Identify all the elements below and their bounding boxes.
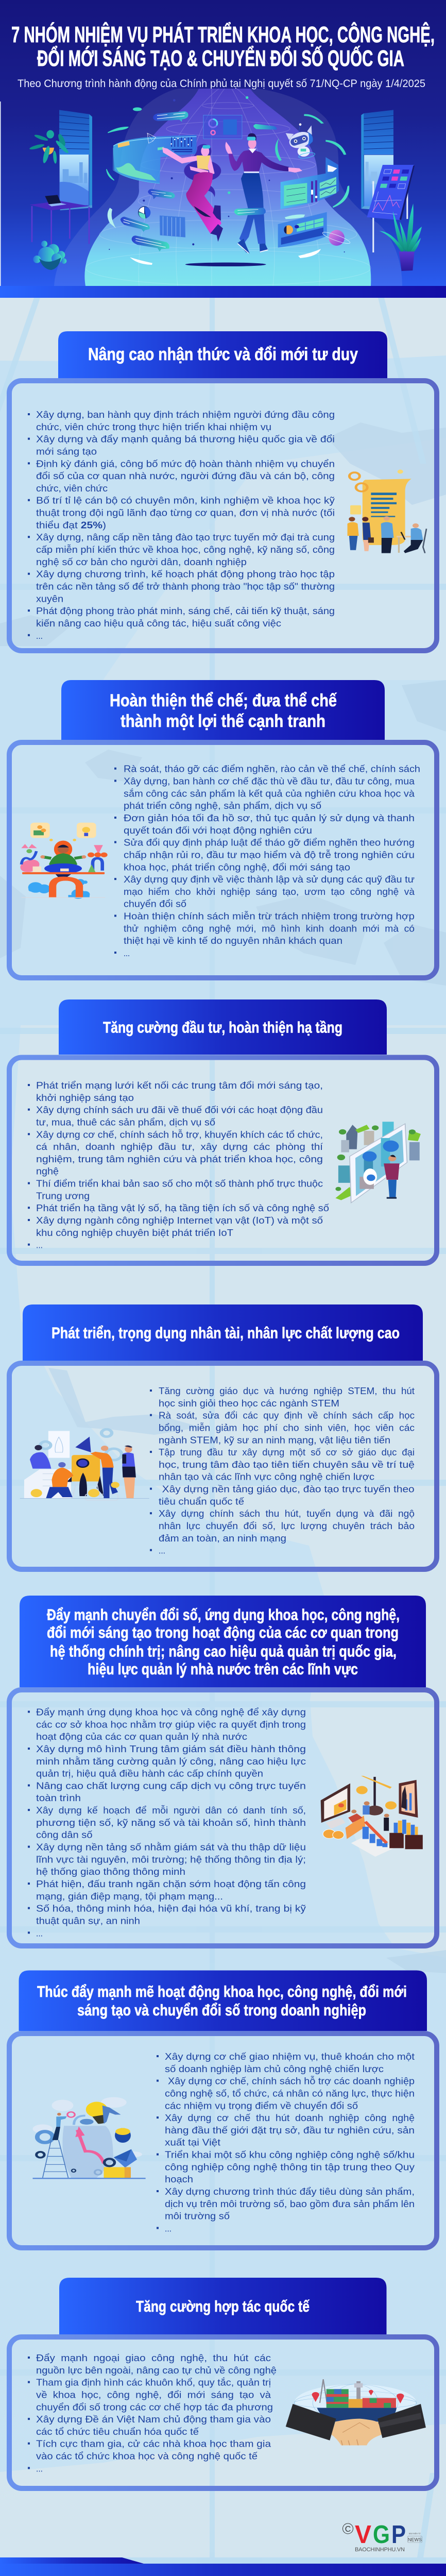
list 5 bbox=[28, 1706, 306, 1938]
list 5: Đẩy mạnh ứng dụng khoa học và công nghệ để xây dựng bbox=[36, 1706, 306, 1718]
list 6: Xây dựng cơ chế thu hút doanh nghiệp công nghệ bbox=[165, 2112, 415, 2123]
heading 4 bbox=[23, 1304, 423, 1361]
section 4: nhân tài bbox=[9, 1304, 437, 1569]
list 3: tư, mua, thuê các sản phẩm, dịch vụ số bbox=[36, 1117, 215, 1127]
site name: BAOCHINHPHU.VN bbox=[355, 2547, 405, 2553]
section 6: doanh nghiệp bbox=[9, 1970, 437, 2248]
list 4: bổng, miễn giảm học phí cho sinh viên, học viên các bbox=[159, 1422, 415, 1433]
list 2: Rà soát, tháo gỡ các điểm nghẽn, rào cản về thể chế, chính sách bbox=[124, 764, 420, 774]
shadow bbox=[185, 263, 263, 266]
list 2: thử nghiệm công nghệ mới, mô hình kinh doanh mới mà có bbox=[124, 923, 415, 934]
section 5: chuyển đổi số trong hệ thống chính trị bbox=[9, 1596, 437, 1946]
heading 7 bbox=[59, 2278, 386, 2334]
hero banner bbox=[0, 0, 446, 298]
list 2: khoa học, phát triển công nghệ, đổi mới sáng tạo bbox=[124, 861, 350, 872]
list 6: số doanh nghiệp làm chủ công nghệ chiến lược bbox=[165, 2063, 384, 2074]
list 6: công nghiệp công nghệ thông tin tập trung theo Quy bbox=[165, 2161, 415, 2172]
list 1: xuyên bbox=[36, 593, 63, 604]
list 3: Xây dựng cơ chế, chính sách hỗ trợ, khuyến khích các tổ chức, bbox=[36, 1129, 323, 1140]
list 7: chuyển đổi số trong các cơ chế hợp tác đa phương bbox=[36, 2401, 273, 2412]
list 4: Xây dựng chính sách thu hút, tuyển dụng và đãi ngộ bbox=[159, 1508, 415, 1519]
list 6: các nhiệm vụ trọng điểm về chuyển đổi số bbox=[165, 2100, 358, 2111]
heading 3 bbox=[59, 999, 387, 1055]
list 7: nguồn lực bên ngoài, nâng cao tự chủ về công nghệ bbox=[36, 2365, 277, 2376]
list 4: đảm an toàn, an ninh mạng bbox=[159, 1533, 286, 1544]
list 3: khởi nghiệp sáng tạo bbox=[36, 1092, 134, 1103]
VGP logo bbox=[343, 2521, 422, 2553]
list 1: thuật trong đội ngũ lãnh đạo từng cơ quan, đơn vị nhà nước (tối bbox=[36, 507, 335, 518]
list 7: Tích cực tham gia, cử các nhà khoa học tham gia bbox=[36, 2438, 271, 2449]
list 6: xuất tại Việt bbox=[165, 2137, 220, 2148]
left scene bbox=[29, 99, 266, 270]
list 5: mạng, gián điệp mạng, tội phạm mạng... bbox=[36, 1891, 223, 1902]
desk and laptop bbox=[29, 195, 90, 246]
list 5: các cơ sở khoa học nhằm trợ giúp việc ra quyết định trong bbox=[36, 1719, 306, 1730]
pie chart bbox=[138, 206, 150, 219]
heading 3: Tăng cường đầu tư, hoàn thiện hạ tầng bbox=[103, 1018, 342, 1037]
man with VR headset bbox=[226, 133, 302, 253]
list 6: hàng đầu thế giới đặt trụ sở, đầu tư nghiên cứu, sản bbox=[165, 2125, 415, 2136]
list 5: Xây dựng kế hoạch để mỗi người dân có danh tính số, bbox=[36, 1805, 306, 1816]
whiteboard bbox=[367, 165, 415, 252]
list 3: khu công nghiệp chuyên biệt phát triển IoT bbox=[36, 1227, 233, 1238]
list 5: minh nhằm tăng cường quản lý công, nâng cao hiệu lực bbox=[36, 1756, 306, 1767]
curved data panel bbox=[113, 133, 197, 184]
list 4: nhân lực chuyển đổi số, lực lượng chuyên trách bảo bbox=[159, 1520, 415, 1531]
panel 4 bbox=[9, 1363, 437, 1569]
illustration: smart city tablet bbox=[335, 1122, 421, 1203]
VGP letters: V bbox=[355, 2521, 371, 2549]
list 6: Xây dựng cơ chế, chính sách hỗ trợ các doanh nghiệp bbox=[168, 2076, 415, 2087]
list 1: cấp miễn phí kiến thức về khoa học, công nghệ, kỹ năng số, công bbox=[36, 544, 335, 555]
list 6: công nghệ số, tổ chức, cá nhân có năng lực, thực hiện bbox=[165, 2088, 415, 2099]
list 4: Tăng cường giáo dục và hướng nghiệp STEM, thu hút bbox=[159, 1385, 415, 1396]
list 6: ... bbox=[165, 2223, 171, 2234]
subtitle: Theo Chương trình hành động của Chính phủ tại Nghị quyết số 71/NQ-CP ngày 1/4/2025 bbox=[18, 78, 425, 90]
list 3: nghiệm, trung tâm nghiên cứu và phát triển khoa học, công bbox=[36, 1154, 323, 1164]
list 7: về khoa học, công nghệ, đổi mới sáng tạo và bbox=[36, 2389, 271, 2400]
list 4: Tập trung đầu tư xây dựng một số cơ sở giáo dục đại bbox=[159, 1447, 415, 1458]
list 5: toàn trình bbox=[36, 1792, 81, 1803]
list 2: Sửa đổi quy định pháp luật để tháo gỡ điểm nghẽn theo hướng bbox=[124, 837, 415, 848]
list 3: Thí điểm triển khai bản sao số cho một số thành phố trực thuộc bbox=[36, 1178, 323, 1189]
list 1: Xây dựng, ban hành quy định trách nhiệm người đứng đầu công bbox=[36, 409, 335, 420]
woman with VR headset bbox=[162, 144, 223, 242]
list 1: Xây dựng và đẩy mạnh quảng bá thương hiệu quốc gia về đổi bbox=[36, 434, 335, 445]
illustration: governance scale and digital devices bbox=[321, 1776, 423, 1857]
section 3: tăng cường đầu tư bbox=[9, 999, 437, 1263]
list 7: Tham gia định hình các khuôn khổ, quy tắc, quản trị bbox=[36, 2377, 271, 2388]
VGP letters bbox=[355, 2521, 406, 2549]
panel 3 bbox=[9, 1057, 437, 1263]
section 2: hoàn thiện thể chế bbox=[9, 680, 437, 978]
list 1: thiểu đạt 25% ) bbox=[36, 519, 106, 530]
heading 7: Tăng cường hợp tác quốc tế bbox=[136, 2297, 310, 2315]
bush bbox=[33, 241, 66, 270]
panel 5 bbox=[9, 1690, 437, 1946]
list 6: Triển khai một số khu công nghiệp công nghệ số/khu bbox=[165, 2149, 415, 2160]
hero background bbox=[0, 0, 446, 286]
VGP letters: G bbox=[373, 2521, 390, 2549]
list 5: Phát hiện, đấu tranh ngăn chặn sớm hoạt động tấn công bbox=[36, 1878, 306, 1889]
list 2: Đơn giản hóa tối đa hồ sơ, thủ tục quản lý sử dụng và thanh bbox=[124, 812, 415, 823]
top centre card bbox=[203, 115, 242, 139]
illustration: team building rocket bbox=[20, 1429, 149, 1500]
heading 6: sáng tạo và chuyển đổi số trong doanh nghiệp bbox=[77, 2001, 366, 2019]
list 5: Xây dựng nền tảng số nhằm giám sát và thu thập dữ liệu bbox=[36, 1841, 306, 1853]
list 6: môi trường số bbox=[165, 2211, 230, 2222]
list 7: ... bbox=[36, 2463, 43, 2473]
list 1: kiến nâng cao hiệu quả công tác, hiệu suất công việc bbox=[36, 618, 281, 629]
list 4: học, trung tâm đào tạo tiên tiến chuyên sâu về trí tuệ bbox=[159, 1459, 415, 1470]
list 4: ngành STEM, kỹ sư an ninh mạng, vật liệu tiên tiến bbox=[159, 1434, 390, 1445]
floating accents bbox=[228, 96, 349, 258]
news badge: NEWS bbox=[408, 2537, 422, 2542]
list 1: ... bbox=[36, 630, 43, 641]
list 2: chuyển đổi số bbox=[124, 899, 186, 909]
heading 5: hiệu lực quản lý nhà nước trên các lĩnh vực bbox=[88, 1660, 358, 1678]
list 5: thuật quân sự, an ninh bbox=[36, 1915, 140, 1926]
list 2: ... bbox=[124, 947, 130, 958]
list 5: quản trị, hiệu quả điều hành các cấp chính quyền bbox=[36, 1768, 263, 1779]
list 2: Xây dựng, ban hành cơ chế đặc thù về đầu tư, đầu tư công, mua bbox=[124, 775, 415, 786]
robot bbox=[286, 123, 315, 159]
list 2: chấp nhận rủi ro, đầu tư mạo hiểm và độ trễ trong nghiên cứu bbox=[124, 849, 415, 860]
list 3: Xây dựng ngành công nghiệp Internet vạn vật (IoT) và một số bbox=[36, 1215, 323, 1226]
hanging plant bbox=[29, 130, 70, 164]
copyright mark: C bbox=[345, 2525, 351, 2534]
news badge bbox=[408, 2532, 422, 2543]
list 2: quyết toán đối với hoạt động nghiên cứu bbox=[124, 825, 312, 836]
title bbox=[11, 21, 435, 71]
list 3: Phát triển mạng lưới kết nối các trung tâm đổi mới sáng tạo, bbox=[36, 1080, 323, 1091]
news badge: BÁO ĐIỆN TỬ bbox=[409, 2532, 421, 2535]
list 7: Xây dựng Đề án Việt Nam chủ động tham gia vào bbox=[36, 2414, 271, 2425]
list 4: Rà soát, sửa đổi các quy định về chính sách cấp học bbox=[159, 1410, 415, 1421]
list 6: dịch vụ trên môi trường số, bao gồm đưa sản phẩm lên bbox=[165, 2198, 415, 2209]
hero bottom bar bbox=[0, 286, 446, 298]
chart card bbox=[160, 215, 185, 238]
list 5: Nâng cao chất lượng cung cấp dịch vụ công trực tuyến bbox=[36, 1780, 306, 1791]
list 1: trên các nền tảng số để trở thành phong trào "học tập số" thường bbox=[36, 581, 335, 591]
hero illustration bbox=[0, 89, 422, 298]
list 1: đổi số của cơ quan nhà nước, người đứng đầu và cán bộ, công bbox=[36, 470, 335, 481]
list 1: chức, viên chức bbox=[36, 483, 108, 494]
illustration: document and people bbox=[348, 470, 426, 553]
list 5: công dân số bbox=[36, 1829, 93, 1840]
floor shadow bbox=[192, 263, 266, 266]
list 1 bbox=[28, 409, 335, 641]
list 5: Số hóa, thông minh hóa, hiện đại hóa vũ khí, trang bị kỹ bbox=[36, 1903, 306, 1914]
footer bar bbox=[0, 2557, 446, 2576]
illustration: person meditating on a balance bbox=[17, 680, 108, 899]
list 4: tiêu chuẩn quốc tế bbox=[159, 1496, 245, 1506]
list 6 bbox=[157, 2051, 415, 2234]
illustration: handshake and cargo ship bbox=[286, 2379, 426, 2445]
heading 2 bbox=[61, 680, 385, 740]
list 1: mới sáng tạo bbox=[36, 446, 97, 456]
list 1: nghệ số cơ bản cho người dân, doanh nghiệp bbox=[36, 556, 247, 567]
panel 6 bbox=[9, 2033, 437, 2248]
VGP letters: P bbox=[391, 2521, 406, 2549]
list 2: sắm công các sản phẩm là kết quả của nghiên cứu khoa học và bbox=[124, 788, 415, 799]
list 1: Bố trí tỉ lệ cán bộ có chuyên môn, kinh nghiệm về khoa học kỹ bbox=[36, 495, 335, 506]
section 1: nâng cao nhận thức bbox=[9, 331, 437, 651]
list 7: vào các tổ chức khoa học và công nghệ quốc tế bbox=[36, 2451, 258, 2462]
list 5: hệ thống giao thông thông minh bbox=[36, 1866, 185, 1877]
floating accents bbox=[107, 99, 194, 265]
list 2: mạo hiểm cho khởi nghiệp sáng tạo, ươm tạo công nghệ và bbox=[124, 886, 415, 897]
potted plant bbox=[379, 204, 422, 271]
list 5: lĩnh vực tài nguyên, môi trường; hệ thống thông tin địa lý; bbox=[36, 1854, 306, 1865]
list 4: ... bbox=[159, 1545, 165, 1556]
list 6: Xây dựng chương trình thúc đẩy tiêu dùng sản phẩm, bbox=[165, 2186, 415, 2197]
planet bbox=[322, 230, 351, 246]
right scene bbox=[185, 96, 422, 271]
heading 2: thành một lợi thế cạnh tranh bbox=[121, 711, 325, 731]
heading 1 bbox=[58, 331, 387, 378]
list 3: Phát triển hạ tầng vật lý số, hạ tầng tiện ích số và công nghệ số bbox=[36, 1202, 329, 1213]
speech bubbles bbox=[121, 111, 188, 251]
list 1: Xây dựng, nâng cấp nền tảng đào tạo trực tuyến mở đại trà cung bbox=[36, 532, 335, 543]
list 3 bbox=[28, 1080, 329, 1250]
section 7: hợp tác quốc tế bbox=[9, 2278, 437, 2488]
list 6: Xây dựng cơ chế giao nhiệm vụ, thuê khoán cho một bbox=[165, 2051, 415, 2062]
list 3: ... bbox=[36, 1240, 43, 1250]
list 3: Xây dựng chính sách ưu đãi về thuế đối với các hoạt động đầu bbox=[36, 1105, 323, 1115]
list 3: cá nhân, doanh nghiệp đầu tư, xây dựng các phòng thí bbox=[36, 1141, 323, 1152]
list 6: hoạch bbox=[165, 2174, 193, 2184]
heading 1: Nâng cao nhận thức và đổi mới tư duy bbox=[88, 345, 358, 364]
list 2: Xây dựng quy định về việc thành lập và sử dụng các quỹ đầu tư bbox=[124, 874, 415, 885]
list 4: học sinh giỏi theo học các ngành STEM bbox=[159, 1398, 339, 1409]
panel 2 bbox=[9, 742, 437, 978]
list 7: các tổ chức tiêu chuẩn hóa quốc tế bbox=[36, 2426, 199, 2437]
list 3: Trung ương bbox=[36, 1190, 90, 1201]
panel 7 bbox=[9, 2337, 437, 2488]
illustration: innovation with ladder and light bulb bbox=[32, 2097, 146, 2179]
list 2 bbox=[114, 764, 420, 958]
list 7: Đẩy mạnh ngoại giao công nghệ, thu hút các bbox=[36, 2352, 271, 2363]
panel 1 bbox=[9, 381, 437, 651]
list 5: ... bbox=[36, 1927, 43, 1938]
list 5: Xây dựng mô hình Trung tâm giám sát điều hành thông bbox=[36, 1743, 306, 1754]
list 1: Phát động phong trào phát minh, sáng chế, cải tiến kỹ thuật, sáng bbox=[36, 605, 335, 616]
list 5: hoạt động của các cơ quan quản lý nhà nước bbox=[36, 1731, 247, 1742]
right curved panels bbox=[278, 157, 339, 248]
heading 6 bbox=[19, 1970, 427, 2031]
copyright mark bbox=[343, 2523, 353, 2534]
speech bubbles bbox=[234, 124, 277, 215]
list 4 bbox=[150, 1385, 415, 1556]
list 2: thiệt hại về kinh tế do nguyên nhân khách quan bbox=[124, 935, 342, 946]
list 1: Định kỳ đánh giá, công bố mức độ hoàn thành nhiệm vụ chuyển bbox=[36, 458, 335, 469]
list 1: chức, viên chức trong thực hiện triển khai nhiệm vụ bbox=[36, 421, 271, 432]
list 2: phát triển công nghệ, sản phẩm, dịch vụ số bbox=[124, 800, 321, 811]
list 7 bbox=[28, 2352, 277, 2473]
list 5: phương tiện số, kỹ năng số và tài khoản số, hình thành bbox=[36, 1817, 306, 1828]
heading 2: Hoàn thiện thể chế; đưa thể chế bbox=[110, 691, 337, 710]
list 4: nhân tạo và các lĩnh vực công nghệ chiến lược bbox=[159, 1471, 374, 1482]
list 3: nghệ bbox=[36, 1166, 59, 1177]
heading 5 bbox=[20, 1596, 426, 1687]
list 1: Xây dựng chương trình, kế hoạch phát động phong trào học tập bbox=[36, 569, 335, 580]
list 2: Hoàn thiện chính sách miễn trừ trách nhiệm trong trường hợp bbox=[124, 910, 415, 921]
list 4: Xây dựng nền tảng giáo dục, đào tạo trực tuyến theo bbox=[162, 1484, 415, 1495]
